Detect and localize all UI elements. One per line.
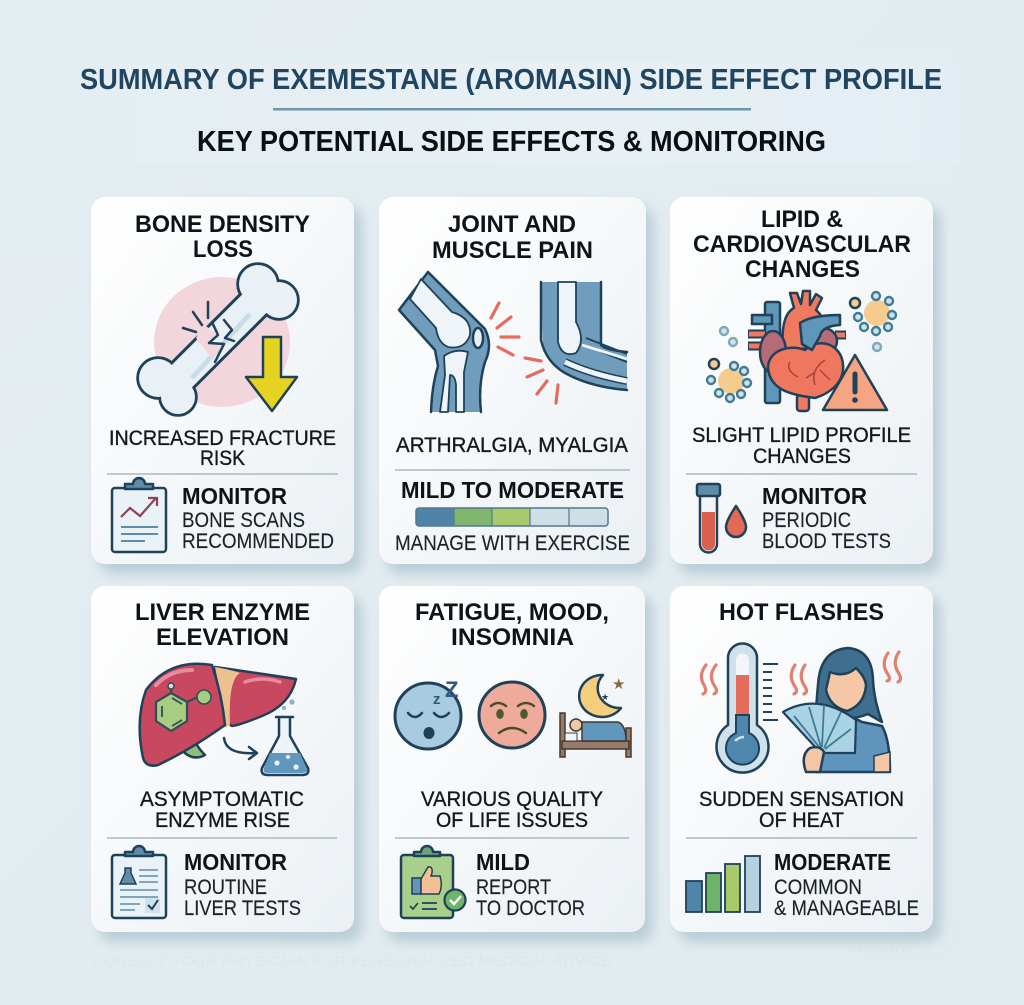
icon: lab flask [262, 699, 308, 775]
card background [91, 586, 354, 932]
panel: bone density loss [91, 197, 354, 564]
monitor note: BONE SCANS [182, 509, 305, 532]
icon: red pain marks [491, 303, 558, 403]
icon: moon and stars [579, 675, 625, 717]
monitor note: LIVER TESTS [184, 897, 301, 920]
description: SLIGHT LIPID PROFILE [692, 424, 911, 447]
heading [432, 211, 593, 264]
card background [379, 197, 646, 564]
subtitle: KEY POTENTIAL SIDE EFFECTS & MONITORING [197, 126, 826, 158]
severity note: COMMON [774, 876, 862, 899]
icon: floating particles [720, 327, 881, 351]
severity bar [416, 508, 608, 526]
icon: moon and stars: ★ [601, 692, 609, 702]
description: ASYMPTOMATIC [140, 788, 304, 811]
heading: MUSCLE PAIN [432, 237, 593, 264]
description: INCREASED FRACTURE [109, 427, 336, 450]
icon: sleepy face: Z [445, 677, 458, 702]
heading: JOINT AND [448, 211, 576, 238]
card background [379, 586, 645, 932]
heading: BONE DENSITY [135, 211, 310, 238]
faded source label: Health [848, 944, 906, 955]
icon: sleepy face: z [433, 691, 440, 708]
description [699, 788, 904, 832]
description: ARTHRALGIA, MYALGIA [396, 434, 628, 457]
description [421, 788, 603, 832]
monitor note: ROUTINE [184, 876, 267, 899]
card background [670, 197, 933, 564]
icon: heart [748, 291, 846, 411]
icon: lipid cluster lower [707, 359, 751, 402]
description: RISK [200, 447, 245, 470]
panel: fatigue, mood, insomnia [379, 586, 645, 932]
description: CHANGES [753, 445, 851, 468]
severity label: MILD TO MODERATE [401, 477, 624, 503]
heading: LIPID & [761, 206, 843, 233]
title divider [273, 108, 751, 110]
panel: joint and muscle pain [379, 197, 646, 564]
monitor note [184, 849, 301, 920]
icon: upset face [479, 682, 545, 748]
arrow: liver to lab test [224, 738, 257, 759]
description [109, 427, 336, 470]
icon: lab clipboard [112, 846, 166, 918]
heading: CARDIOVASCULAR [693, 231, 911, 258]
icon: clipboard chart [112, 478, 166, 552]
panel: lipid and cardiovascular changes [670, 197, 933, 564]
severity note: TO DOCTOR [476, 897, 585, 920]
monitor note: RECOMMENDED [182, 530, 334, 553]
description: ENZYME RISE [155, 809, 290, 832]
heading: ELEVATION [156, 624, 289, 651]
heading: HOT FLASHES [719, 599, 884, 626]
severity note: MILD [476, 849, 530, 875]
severity note: MODERATE [774, 849, 891, 875]
panel: hot flashes [670, 586, 933, 932]
monitor note: BLOOD TESTS [762, 530, 891, 553]
header panel [50, 50, 960, 185]
icon: fractured bone with down arrow [139, 265, 297, 414]
monitor note: MONITOR [184, 849, 287, 875]
description: SUDDEN SENSATION [699, 788, 904, 811]
icon: lipid cluster upper [850, 292, 896, 335]
heading [135, 211, 310, 263]
icon: thumbs-up clipboard [401, 846, 466, 918]
monitor note: MONITOR [182, 483, 287, 509]
card background [670, 586, 933, 932]
icon: sleepy face [395, 677, 461, 749]
description: VARIOUS QUALITY [421, 788, 603, 811]
icon: liver [140, 664, 296, 766]
description: OF HEAT [759, 809, 844, 832]
monitor note [762, 483, 891, 553]
icon: moderate bar chart [686, 856, 760, 912]
icon: thermometer [717, 644, 778, 773]
heading: CHANGES [745, 256, 860, 283]
icon: woman with fan [783, 648, 890, 772]
management note: MANAGE WITH EXERCISE [395, 532, 630, 555]
icon: person in bed [560, 713, 631, 757]
icon: warning triangle [823, 355, 887, 410]
monitor note: MONITOR [762, 483, 867, 509]
heading: LOSS [193, 236, 253, 263]
card background [91, 197, 354, 564]
severity note: & MANAGEABLE [774, 897, 919, 920]
description: OF LIFE ISSUES [436, 809, 588, 832]
description [692, 424, 911, 468]
heading [693, 206, 911, 283]
description [140, 788, 304, 832]
panel: liver enzyme elevation [91, 586, 354, 932]
icon: heat waves [701, 652, 900, 694]
severity note [774, 849, 919, 920]
icon: blood tube and drop [697, 484, 746, 552]
faded footer disclaimer: CONSULT YOUR PHYSICIAN FOR PERSONALIZED MEDICAL ADVICE [92, 953, 612, 970]
heading: INSOMNIA [451, 624, 574, 651]
icon: moon and stars: ★ [612, 676, 625, 693]
icon: knee joint [399, 272, 489, 412]
severity note: REPORT [476, 876, 551, 899]
heading: LIVER ENZYME [135, 599, 310, 626]
monitor note: PERIODIC [762, 509, 851, 532]
heading [135, 599, 310, 651]
severity note [476, 849, 585, 920]
heading: FATIGUE, MOOD, [415, 599, 609, 626]
heading [415, 599, 609, 651]
monitor note [182, 483, 334, 553]
icon: elbow joint [541, 282, 627, 390]
title: SUMMARY OF EXEMESTANE (AROMASIN) SIDE EFFECT PROFILE [80, 64, 942, 96]
